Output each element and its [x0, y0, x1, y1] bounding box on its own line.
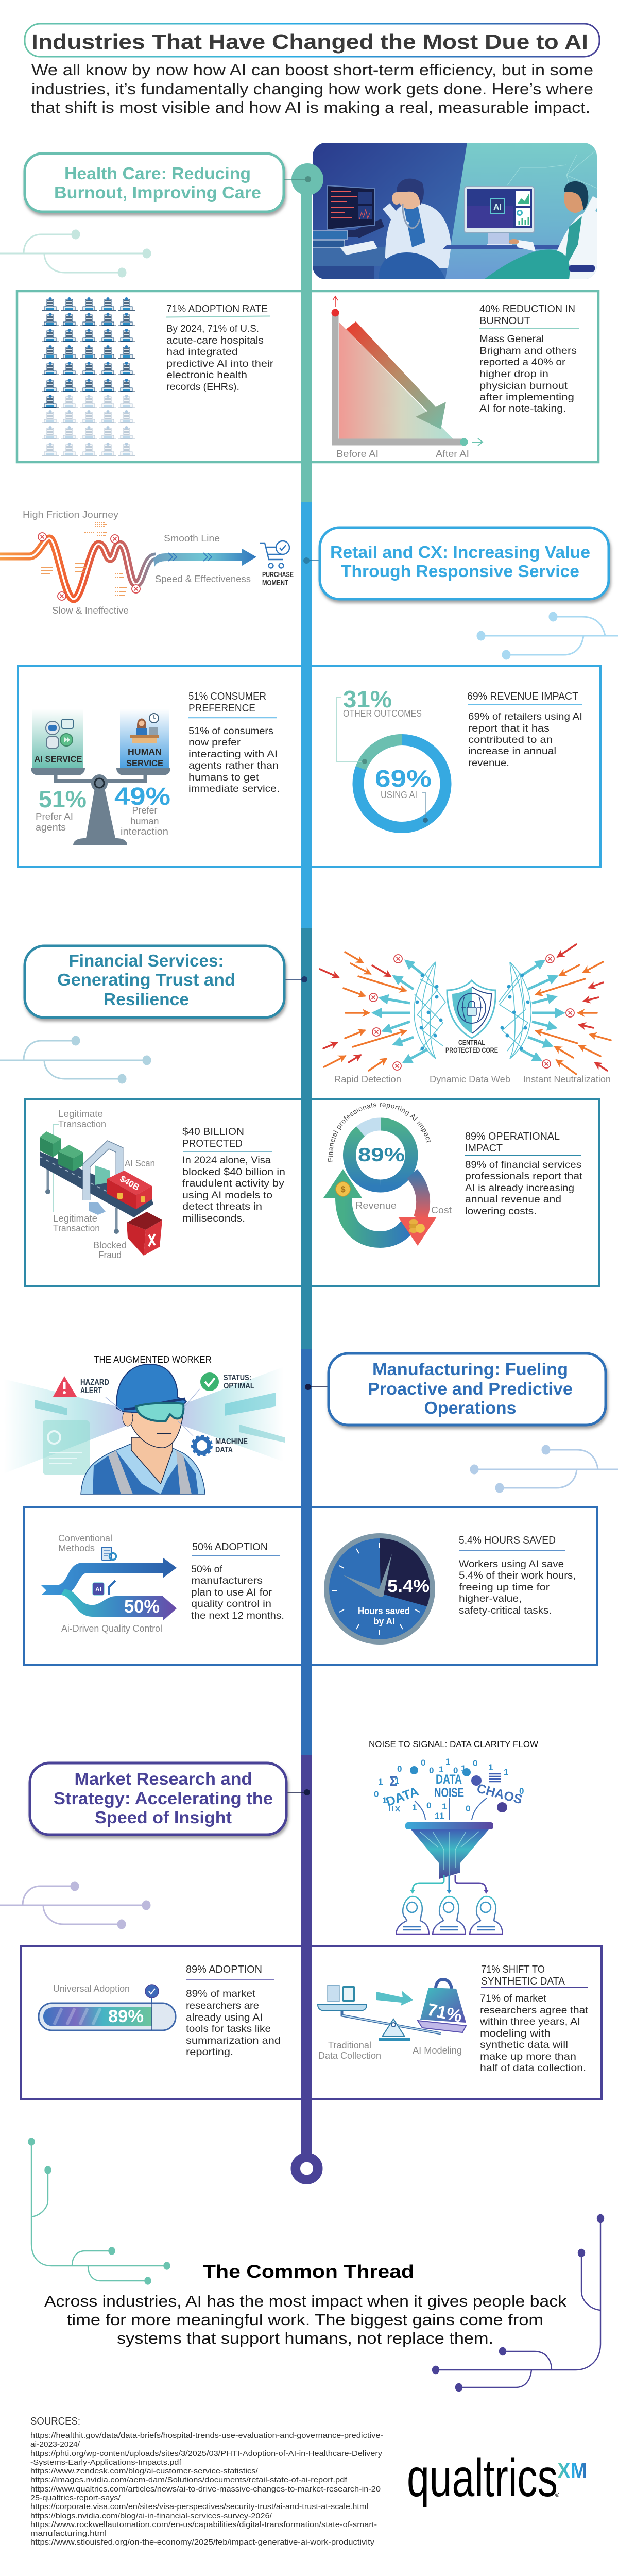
scattered data words and digits: NOISE — [434, 1786, 464, 1800]
scattered data words and digits: 0 — [421, 1758, 425, 1768]
stat: 40% reduction in burnout: 40% REDUCTION IN — [479, 303, 575, 315]
stat: 89% adoption: 89% of market — [186, 1988, 256, 1999]
logo: qualtrics XM: qualtrics — [407, 2448, 558, 2508]
sources: 25-qualtrics-report-says/ — [30, 2494, 121, 2502]
illustration: high friction versus smooth customer journey: High Friction Journey — [23, 510, 118, 520]
chart: two-path quality control arrows: Ai-Driven Quality Control — [61, 1623, 162, 1634]
stat: $40 billion protected: PROTECTED — [182, 1138, 243, 1149]
stat: 51% consumer preference: immediate service. — [188, 783, 280, 794]
sources: https://www.qualtrics.com/articles/news/ai-to-drive-massive-changes-to-market-research-in-20 — [30, 2485, 381, 2494]
stat: 40% reduction in burnout: physician burnout — [479, 380, 568, 392]
stat: 5.4% hours saved: safety-critical tasks. — [459, 1605, 552, 1616]
stat: 50% adoption: the next 12 months. — [191, 1610, 284, 1621]
illustration: high friction versus smooth customer journey: Slow & Ineffective — [52, 605, 129, 616]
scale: traditional data versus AI modeling: Traditional — [328, 2040, 371, 2050]
stat: 50% adoption: 50% ADOPTION — [192, 1541, 268, 1553]
balance scale: AI versus human service — [31, 709, 170, 845]
balance scale: AI versus human service: SERVICE — [126, 759, 163, 768]
sources — [30, 2416, 383, 2547]
stat: 51% consumer preference: interacting with AI — [188, 749, 278, 760]
scale: traditional data versus AI modeling: AI Modeling — [413, 2045, 462, 2056]
balance scale: AI versus human service: HUMAN — [128, 748, 162, 757]
stat: 71% adoption rate: predictive AI into their — [166, 358, 274, 369]
stat: 71% adoption rate: had integrated — [166, 346, 238, 358]
stat: 50% adoption — [191, 1541, 284, 1621]
sources: https://images.nvidia.com/aem-dam/Solutions/documents/retail-state-of-ai-report.pdf — [30, 2476, 348, 2484]
stat: 71% shift to synthetic data: SYNTHETIC DATA — [481, 1976, 565, 1987]
stat: 50% adoption: plan to use AI for — [191, 1587, 272, 1598]
heading: market research: Speed of Insight — [95, 1808, 232, 1827]
chart: burnout before and after AI — [332, 296, 483, 459]
icon: status optimal: STATUS: — [224, 1374, 251, 1382]
stat: 69% revenue impact: 69% of retailers using AI — [468, 711, 582, 722]
conclusion text: systems that support humans, not replace them. — [117, 2329, 493, 2347]
panel: health care stats — [17, 291, 598, 462]
stat: 89% operational impact: IMPACT — [465, 1143, 503, 1154]
stat: 51% consumer preference: humans to get — [188, 772, 260, 783]
stat: 71% shift to synthetic data: 71% of market — [480, 1993, 547, 2004]
donut chart: 69% using AI: 69% — [375, 765, 432, 792]
conclusion text: Across industries, AI has the most impact when it gives people back — [44, 2292, 567, 2310]
timeline spine — [291, 163, 323, 2162]
scattered data words and digits: 1 — [488, 1762, 493, 1772]
intro text: industries, it’s fundamentally changing how work gets done. Here’s where — [31, 80, 593, 98]
conclusion heading: The Common Thread — [203, 2262, 414, 2282]
heading: financial services — [25, 946, 307, 1018]
conclusion text — [44, 2292, 567, 2347]
heading: financial services: Financial Services: — [69, 951, 224, 970]
scattered data words and digits: 0 — [374, 1789, 379, 1799]
neutralized threat markers — [369, 955, 574, 1070]
illustration: high friction versus smooth customer journey: Smooth Line — [164, 533, 220, 544]
friction line highlight — [0, 538, 156, 599]
funnel — [405, 1822, 493, 1879]
chart: two-path quality control arrows: AI — [95, 1586, 101, 1593]
output arrows — [410, 1875, 489, 1894]
attack arrows — [320, 944, 611, 1074]
stat: 5.4% hours saved: Workers using AI save — [459, 1558, 564, 1570]
intro text: We all know by now how AI can boost short-term efficiency, but in some — [31, 61, 593, 79]
heading: manufacturing: Manufacturing: Fueling — [372, 1360, 568, 1379]
scattered data words and digits: DATA — [384, 1784, 421, 1809]
stat: 71% adoption rate: 71% ADOPTION RATE — [166, 303, 268, 315]
stat: 71% shift to synthetic data — [479, 1964, 589, 2074]
stat: 50% adoption: quality control in — [191, 1598, 271, 1609]
progress bar: 89% universal adoption — [39, 1984, 176, 2030]
stat: 40% reduction in burnout: after implementing — [479, 392, 574, 403]
stat: 89% operational impact: annual revenue and — [465, 1194, 561, 1205]
stat: 50% adoption: manufacturers — [191, 1575, 263, 1586]
outward defense spokes — [373, 961, 563, 1062]
donut chart: 69% using AI: USING AI — [381, 790, 417, 800]
decorative branch: finance — [0, 1037, 150, 1083]
stat: 89% adoption — [186, 1964, 281, 2058]
heading: market research: Market Research and — [74, 1769, 252, 1788]
relaxed doctor — [484, 181, 597, 279]
icon: hazard alert: HAZARD — [80, 1378, 109, 1387]
stat: 69% revenue impact — [467, 691, 582, 769]
illustration: noise to signal data funnel — [369, 1739, 538, 1934]
balance scale: AI versus human service: 51% — [39, 786, 87, 812]
clock: 5.4% hours saved by AI: Hours saved — [358, 1606, 410, 1616]
stat: 51% consumer preference: 51% of consumers — [188, 725, 273, 737]
chart: 89% revenue and cost cycle: Cost — [431, 1205, 452, 1215]
desk right — [443, 245, 560, 249]
smooth arrow — [153, 549, 256, 567]
stat: 5.4% hours saved — [459, 1535, 576, 1616]
decorative branch: retail — [477, 613, 618, 659]
stat: 51% consumer preference: PREFERENCE — [188, 703, 255, 714]
heading: health care: Health Care: Reducing — [64, 164, 251, 183]
stat: 71% shift to synthetic data: researchers agree that — [480, 2005, 589, 2016]
icon: machine data gear: MACHINE — [215, 1437, 248, 1446]
icon: clipboard and gear — [101, 1547, 116, 1560]
stat: 40% reduction in burnout — [479, 303, 579, 414]
illustration: central protected core defense network: Instant Neutralization — [523, 1074, 611, 1084]
stat: 71% shift to synthetic data: within three years, AI — [479, 2016, 580, 2027]
chart: burnout before and after AI: After AI — [436, 449, 469, 459]
panel: manufacturing stats — [24, 1507, 597, 1665]
chart: two-path quality control arrows: Conventional — [58, 1533, 112, 1544]
scattered data words and digits: 1 — [461, 1764, 466, 1773]
data web networks — [414, 962, 531, 1059]
stat: 40% reduction in burnout: BURNOUT — [479, 315, 530, 327]
stat: 5.4% hours saved: freeing up time for — [459, 1582, 550, 1593]
scattered data words and digits: 0 — [466, 1804, 470, 1814]
heading: health care: Burnout, Improving Care — [54, 183, 261, 202]
scattered data words and digits: 0 — [473, 1758, 477, 1768]
scattered data words and digits: 1 — [442, 1802, 447, 1811]
scattered data words and digits — [374, 1757, 524, 1821]
donut chart: 69% using AI: OTHER OUTCOMES — [343, 708, 422, 719]
stat: 69% revenue impact: contributed to an — [468, 734, 553, 745]
stat: 89% operational impact: 89% OPERATIONAL — [465, 1131, 560, 1142]
balance scale: AI versus human service: Prefer AI — [36, 811, 73, 822]
stat: 71% adoption rate — [166, 303, 274, 393]
stat: 69% revenue impact: increase in annual — [468, 745, 556, 757]
icon: hazard alert — [53, 1376, 109, 1397]
illustration: noise to signal data funnel: NOISE TO SIGNAL: DATA CLARITY FLOW — [369, 1739, 538, 1749]
sources: https://www.stlouisfed.org/on-the-economy/2025/feb/impact-generative-ai-work-productivity — [30, 2538, 375, 2547]
stat: $40 billion protected: In 2024 alone, Visa — [182, 1155, 271, 1166]
donut chart: 69% using AI: 31% — [343, 686, 392, 713]
heading: health care — [25, 154, 311, 212]
clock: 5.4% hours saved by AI: by AI — [373, 1616, 395, 1626]
illustration: high friction versus smooth customer journey: MOMENT — [262, 579, 288, 587]
scale: traditional data versus AI modeling: Data Collection — [318, 2050, 381, 2061]
icon: shopping cart — [260, 541, 289, 568]
hospital icon grid — [42, 297, 135, 456]
icon: machine data gear: DATA — [215, 1446, 233, 1454]
scale: traditional data versus AI modeling: 71% — [425, 2000, 464, 2026]
icon: shield with brain and lock — [447, 980, 495, 1038]
illustration: high friction versus smooth customer journey — [0, 510, 294, 616]
stat: 40% reduction in burnout: higher drop in — [479, 368, 548, 380]
stat: $40 billion protected — [182, 1126, 285, 1224]
illustration: central protected core defense network: Rapid Detection — [334, 1074, 401, 1084]
decorative branch: manufacturing — [471, 1446, 618, 1492]
decorative branch: conclusion teal — [29, 2138, 170, 2284]
icon: machine data gear — [192, 1436, 248, 1455]
logo: qualtrics XM: XM — [557, 2458, 587, 2483]
stat: 69% revenue impact: report that it has — [468, 723, 550, 734]
progress bar: 89% universal adoption: Universal Adoption — [53, 1984, 130, 1994]
insight heads — [396, 1896, 503, 1934]
timeline end node — [290, 2153, 322, 2184]
stat: 5.4% hours saved: 5.4% HOURS SAVED — [459, 1535, 556, 1546]
scattered data words and digits: 1 — [394, 1776, 399, 1786]
scattered data words and digits: 1 — [378, 1777, 383, 1787]
stat: 51% consumer preference: agents rather than — [188, 760, 279, 771]
balance scale: AI versus human service: human — [130, 816, 159, 826]
sources: https://corporate.visa.com/en/sites/visa-perspectives/security-trust/ai-and-trust-at-scale.html — [30, 2503, 368, 2511]
scattered data words and digits: 1 — [504, 1767, 508, 1777]
stat: 51% consumer preference: now prefer — [188, 737, 241, 748]
illustration: the augmented worker: THE AUGMENTED WORKER — [94, 1354, 212, 1365]
stat: 69% revenue impact: revenue. — [468, 757, 509, 769]
scattered data words and digits: CHAOS — [475, 1781, 524, 1807]
decorative branch: conclusion purple — [433, 2215, 604, 2391]
donut chart: 69% using AI — [336, 686, 446, 827]
scattered data words and digits: 1 — [439, 1811, 444, 1821]
scattered data words and digits: 0 — [453, 1766, 458, 1775]
stat: 89% adoption: 89% ADOPTION — [186, 1964, 262, 1975]
sources: ai-2023-2024/ — [30, 2441, 80, 2449]
right monitor with AI dashboard — [465, 187, 534, 246]
clock: 5.4% hours saved by AI: 5.4% — [387, 1577, 430, 1596]
heading: retail and CX: Through Responsive Service — [341, 562, 579, 581]
stat: $40 billion protected: $40 BILLION — [182, 1126, 244, 1138]
sources: SOURCES: — [30, 2416, 80, 2427]
heading: financial services: Resilience — [104, 990, 189, 1009]
illustration: burned out doctor versus relaxed doctor with AI — [313, 143, 597, 279]
stat: $40 billion protected: using AI models to — [182, 1190, 272, 1201]
stat: 89% adoption: reporting. — [186, 2046, 233, 2058]
stat: 40% reduction in burnout: reported a 40% or — [479, 357, 566, 368]
illustration: fraud conveyor belt: AI Scan — [125, 1158, 155, 1168]
icon: AI robot — [46, 719, 73, 749]
stat: 89% adoption: researchers are — [186, 2000, 259, 2011]
stat: 89% operational impact: lowering costs. — [465, 1206, 537, 1217]
illustration: central protected core defense network: CENTRAL — [458, 1038, 485, 1046]
heading: financial services: Generating Trust and — [57, 970, 235, 989]
sources: -Systems-Early-Applications-Impacts.pdf — [30, 2459, 182, 2467]
scattered data words and digits: Σ — [389, 1773, 398, 1789]
balance scale: AI versus human service: interaction — [121, 826, 168, 837]
stat: 40% reduction in burnout: AI for note-taking. — [479, 403, 566, 414]
sources: manufacturing.html — [30, 2530, 107, 2538]
icon: human agent — [130, 714, 159, 743]
chart: 89% revenue and cost cycle: $ — [340, 1184, 346, 1194]
sources: https://blogs.nvidia.com/blog/ai-in-financial-services-survey-2026/ — [30, 2512, 272, 2520]
illustration: fraud conveyor belt: Transaction — [58, 1119, 106, 1129]
scattered data words and digits: 1 — [382, 1795, 387, 1805]
stat: 71% adoption rate: electronic health — [166, 369, 247, 381]
illustration: fraud conveyor belt: Transaction — [53, 1223, 100, 1233]
tired doctor — [379, 179, 451, 279]
stat: $40 billion protected: detect threats in — [182, 1201, 262, 1212]
stat: 50% adoption: 50% of — [191, 1564, 223, 1575]
stat: 69% revenue impact: 69% REVENUE IMPACT — [467, 691, 578, 702]
illustration: fraud conveyor belt — [40, 1109, 162, 1260]
decorative branch: health care — [0, 230, 150, 277]
sources: https://phti.org/wp-content/uploads/sites/3/2025/03/PHTI-Adoption-of-AI-in-Healthcare-Delivery — [30, 2450, 383, 2458]
icon: hazard alert: ALERT — [80, 1386, 102, 1395]
stat: 71% adoption rate: By 2024, 71% of U.S. — [166, 323, 259, 334]
panel: market research stats — [21, 1946, 602, 2099]
chevrons — [168, 553, 212, 561]
panel: financial services stats — [24, 1098, 600, 1287]
chart: 89% revenue and cost cycle: 89% — [358, 1144, 405, 1165]
stat: 89% operational impact — [465, 1131, 583, 1217]
illustration: fraud conveyor belt: Fraud — [98, 1250, 122, 1260]
scattered data words and digits: 0 — [397, 1764, 402, 1774]
illustration: central protected core defense network: Dynamic Data Web — [430, 1074, 510, 1084]
chart: two-path quality control arrows: 50% — [124, 1597, 160, 1617]
right monitor with AI dashboard: AI — [493, 203, 502, 212]
stat: 40% reduction in burnout: Brigham and others — [479, 345, 577, 357]
scattered data words and digits: 1 — [435, 1811, 439, 1821]
stat: 51% consumer preference — [188, 691, 280, 794]
scattered data words and digits: DATA — [436, 1772, 462, 1787]
stat: $40 billion protected: milliseconds. — [182, 1213, 245, 1224]
stat: 89% operational impact: AI is already increasing — [465, 1182, 574, 1194]
chart: 89% revenue and cost cycle — [323, 1103, 452, 1248]
icon: status optimal — [200, 1372, 254, 1391]
illustration: high friction versus smooth customer journey: Speed & Effectiveness — [155, 574, 251, 584]
conclusion text: time for more meaningful work. The biggest gains come from — [67, 2311, 543, 2329]
left monitor with code — [327, 185, 374, 237]
stat: 5.4% hours saved: higher-value, — [459, 1593, 522, 1604]
stat: $40 billion protected: blocked $40 billion in — [182, 1166, 285, 1178]
stat: 40% reduction in burnout: Mass General — [479, 333, 544, 345]
decorative branch: market research — [0, 1882, 150, 1928]
heading: market research — [30, 1763, 310, 1835]
illustration: fraud conveyor belt: Legitimate — [53, 1213, 97, 1224]
scattered data words and digits: 1 — [445, 1757, 450, 1767]
illustration: central protected core defense network: PROTECTED CORE — [445, 1046, 498, 1054]
heading: market research: Strategy: Accelerating the — [54, 1789, 273, 1808]
sources: https://www.rockwellautomation.com/en-us/capabilities/digital-transformation/state-of-smart- — [30, 2521, 377, 2529]
illustration: fraud conveyor belt: Legitimate — [58, 1109, 103, 1119]
chart: 89% revenue and cost cycle: Revenue — [355, 1200, 397, 1211]
illustration: fraud conveyor belt: Blocked — [93, 1240, 127, 1250]
desk and files — [313, 219, 391, 279]
worker figure — [81, 1364, 205, 1494]
stat: 51% consumer preference: 51% CONSUMER — [188, 691, 266, 702]
holographic data rays — [4, 1367, 285, 1475]
illustration: fraud conveyor belt: $40B — [118, 1174, 141, 1193]
scattered data words and digits: 0 — [426, 1801, 431, 1810]
clock: 5.4% hours saved by AI — [327, 1536, 433, 1642]
illustration: central protected core defense network — [320, 944, 611, 1084]
scattered data words and digits: 0 — [519, 1786, 524, 1796]
balance scale: AI versus human service: agents — [36, 822, 66, 833]
stat: 71% shift to synthetic data: make up more than — [480, 2051, 576, 2062]
icon: status optimal: OPTIMAL — [224, 1382, 254, 1391]
chart: two-path quality control arrows: Methods — [58, 1543, 95, 1553]
balance scale: AI versus human service: AI SERVICE — [34, 755, 82, 764]
progress bar: 89% universal adoption: 89% — [108, 2007, 144, 2026]
heading: manufacturing — [305, 1353, 606, 1425]
stat: 89% adoption: already using AI — [186, 2012, 263, 2023]
stat: 71% shift to synthetic data: 71% SHIFT TO — [481, 1964, 545, 1975]
heading: retail and CX: Retail and CX: Increasing Value — [330, 543, 590, 562]
chart: 89% revenue and cost cycle: Financial professionals reporting AI impact — [328, 1103, 431, 1162]
stat: $40 billion protected: fraudulent activity by — [182, 1178, 284, 1189]
stat: 89% adoption: summarization and — [186, 2035, 281, 2046]
balance scale: AI versus human service: 49% — [114, 783, 170, 810]
scattered data words and digits: 0 — [429, 1766, 434, 1775]
friction points — [38, 522, 140, 600]
stat: 71% adoption rate: records (EHRs). — [166, 381, 239, 393]
scale: traditional data versus AI modeling — [318, 1979, 466, 2061]
sources: https://www.zendesk.com/blog/ai-customer-service-statistics/ — [30, 2467, 259, 2476]
high friction line — [0, 538, 156, 599]
stat: 89% operational impact: professionals report that — [465, 1171, 583, 1182]
sources: https://healthit.gov/data/data-briefs/hospital-trends-use-evaluation-and-governance-predictive- — [30, 2432, 383, 2440]
stat: 89% adoption: tools for tasks like — [186, 2023, 271, 2035]
stat: 5.4% hours saved: 5.4% of their work hours, — [459, 1570, 576, 1581]
title: Industries That Have Changed the Most Due to AI — [31, 30, 588, 54]
chart: burnout before and after AI: Before AI — [336, 449, 379, 459]
illustration: the augmented worker — [4, 1354, 285, 1494]
chart: two-path quality control arrows — [41, 1533, 177, 1634]
scattered data words and digits: 1 — [412, 1803, 417, 1812]
heading: manufacturing: Operations — [424, 1398, 516, 1417]
intro text: that shift is most visible and how AI is making a real, measurable impact. — [31, 98, 590, 116]
stat: 71% shift to synthetic data: half of data collection. — [480, 2062, 586, 2074]
illustration: high friction versus smooth customer journey: PURCHASE — [262, 571, 294, 579]
stat: 71% shift to synthetic data: synthetic data will — [480, 2039, 568, 2050]
scattered data words and digits: 1 — [439, 1765, 443, 1774]
stat: 71% shift to synthetic data: modeling with — [480, 2028, 551, 2039]
panel: retail stats — [18, 666, 600, 867]
stat: 71% adoption rate: acute-care hospitals — [166, 335, 264, 346]
logo: qualtrics XM: ® — [555, 2492, 559, 2498]
title — [25, 24, 599, 57]
heading: manufacturing: Proactive and Predictive — [368, 1379, 573, 1398]
stat: 89% operational impact: 89% of financial services — [465, 1159, 581, 1171]
intro text — [31, 61, 593, 116]
balance scale: AI versus human service: Prefer — [132, 805, 158, 816]
heading: retail and CX — [303, 528, 609, 599]
